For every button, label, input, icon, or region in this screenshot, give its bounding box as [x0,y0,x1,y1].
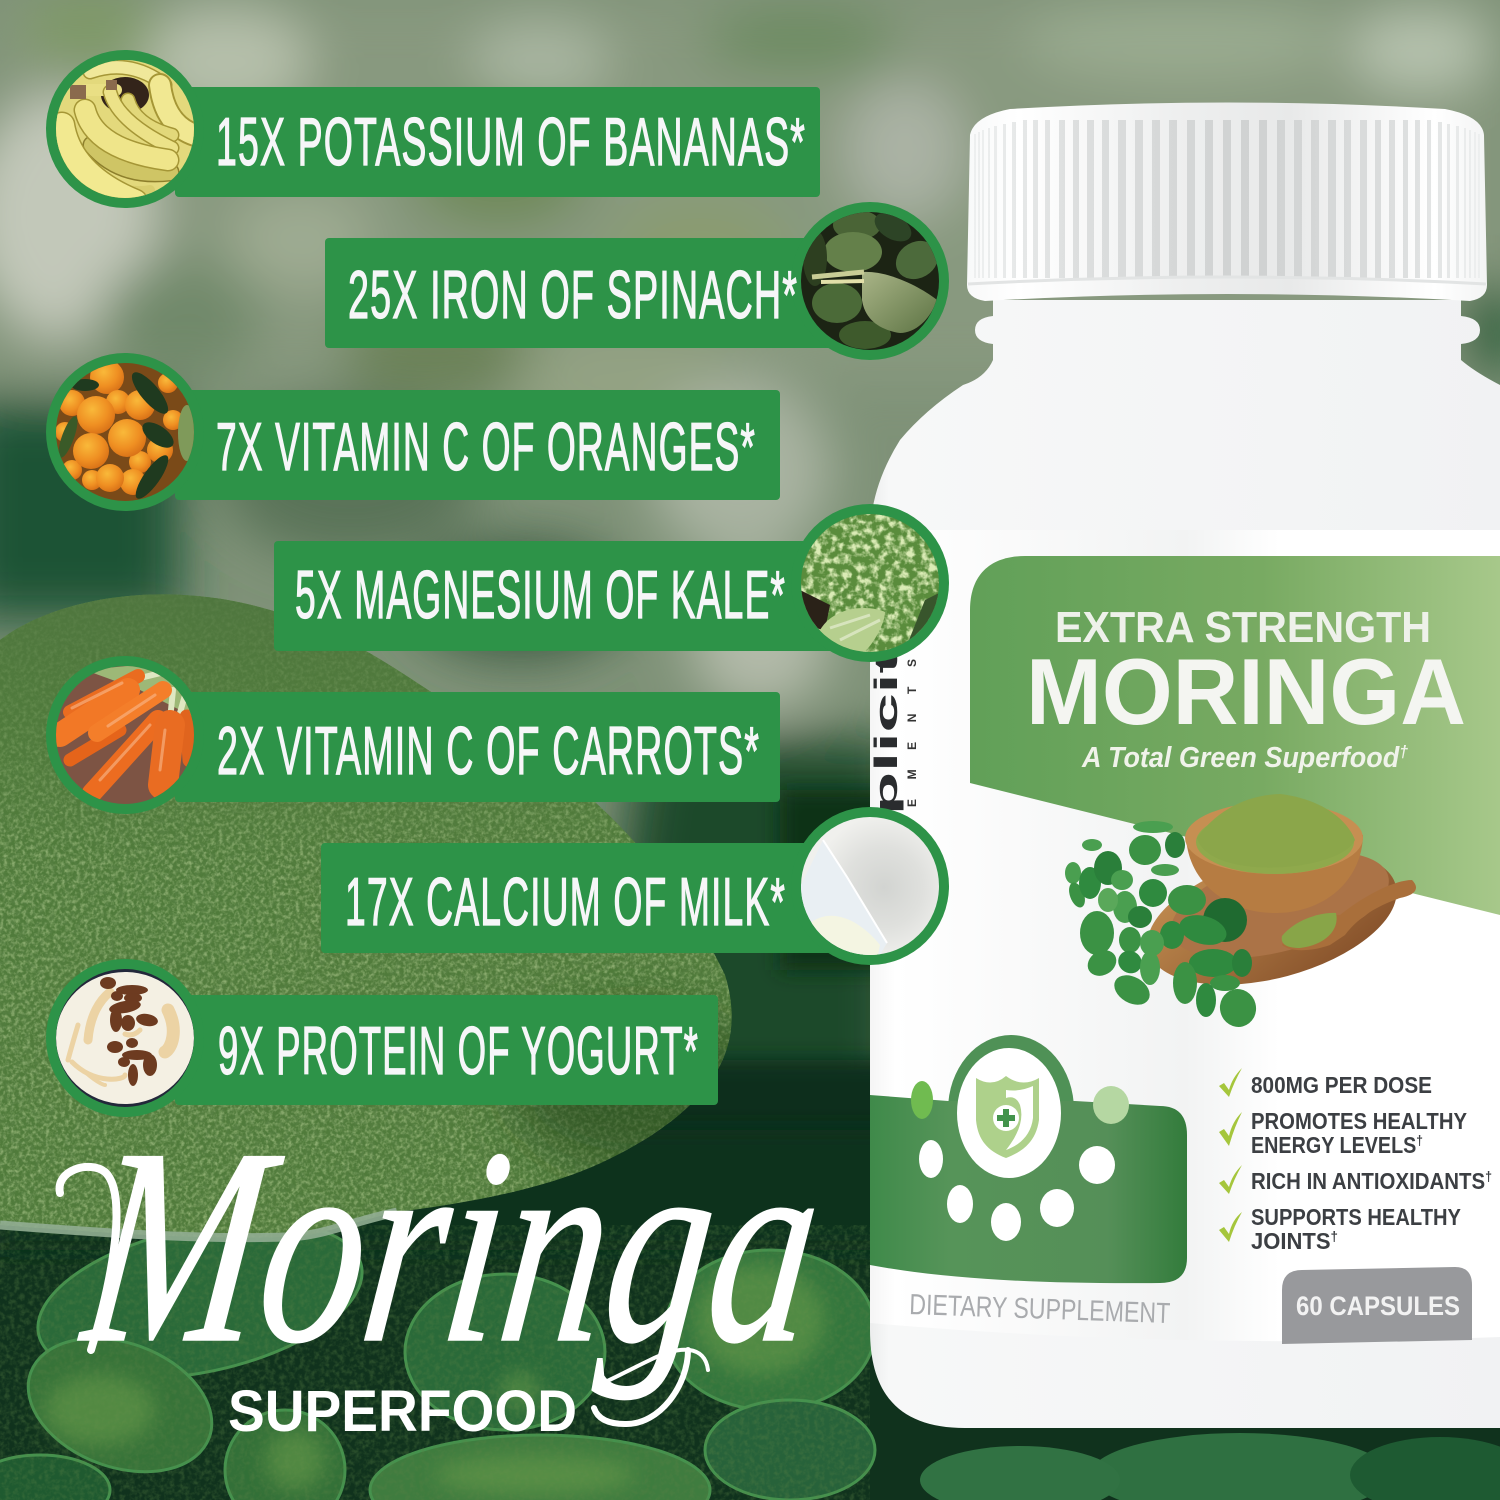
benefit: joints: † [1331,1228,1338,1244]
callout: kale [274,504,949,662]
bottle cap [967,102,1487,301]
brand name vertical: EMENTS [905,659,919,807]
superfood word: SUPERFOOD [228,1379,577,1444]
script heading: Moringa Superfood [60,1090,836,1444]
text: 25X IRON OF SPINACH* [348,257,798,333]
text: 7X VITAMIN C OF ORANGES* [216,409,756,485]
leaves [1065,821,1260,1031]
text: 9X PROTEIN OF YOGURT* [218,1013,699,1089]
moringa leaves at bottom [0,1130,1500,1500]
capsule count badge: 60 CAPSULES [1296,1291,1460,1321]
icon: oranges [56,363,194,501]
benefit: 800mg: 800MG PER DOSE [1251,1072,1432,1098]
benefit: energy [1219,1108,1467,1158]
text: 15X POTASSIUM OF BANANAS* [216,104,806,180]
title: Moringa: MORINGA [1026,639,1466,744]
powder mound [0,594,732,1237]
icon: carrots [56,666,194,804]
label background [870,530,1500,1341]
text: 2X VITAMIN C OF CARROTS* [217,713,760,789]
callout: yogurt [46,959,718,1117]
brand name vertical [874,657,916,810]
icon: spinach [801,212,939,350]
icon: shield in circle [957,1048,1061,1178]
callout: spinach [325,202,949,360]
capsule count badge [1282,1267,1472,1344]
dots [911,1081,1129,1241]
title: Extra Strength: EXTRA STRENGTH [1055,603,1431,652]
script flourishes [60,1167,708,1424]
icon: milk [800,815,940,960]
benefit: joints: SUPPORTS HEALTHY [1251,1204,1461,1230]
benefit: joints: JOINTS [1251,1228,1334,1254]
text: 17X CALCIUM OF MILK* [345,864,786,940]
text: 5X MAGNESIUM OF KALE* [295,557,786,633]
benefit: energy: † [1416,1132,1423,1148]
dietary supplement label: DIETARY SUPPLEMENT [909,1289,1171,1330]
benefit: energy: ENERGY LEVELS [1251,1132,1444,1158]
brand name vertical: plicit [868,649,904,815]
product photo: bowl of powder and leaves [1065,794,1416,1031]
icon: kale [800,512,945,657]
benefit list [1219,1068,1492,1254]
green label panel [970,556,1500,915]
benefit: energy: PROMOTES HEALTHY [1251,1108,1467,1134]
script word: Moringa [70,1090,836,1401]
subtitle: † [1399,742,1408,761]
wooden spoon [1282,880,1416,950]
benefit: joints [1219,1204,1461,1254]
callout: milk [321,807,949,965]
callout: bananas [46,50,820,208]
callout: oranges [46,353,780,511]
icon: bananas [56,60,194,198]
wooden plate [1133,827,1411,1009]
supplement bottle [868,102,1500,1428]
green panel with icon [870,1035,1187,1283]
benefit: antioxidants: † [1485,1168,1492,1184]
icon: yogurt [56,969,194,1107]
bottle body [870,300,1500,1428]
benefit: 800mg [1219,1068,1432,1098]
wooden bowl [1185,794,1363,913]
subtitle: A Total Green Superfood [1082,742,1423,774]
callout: carrots [46,656,780,814]
